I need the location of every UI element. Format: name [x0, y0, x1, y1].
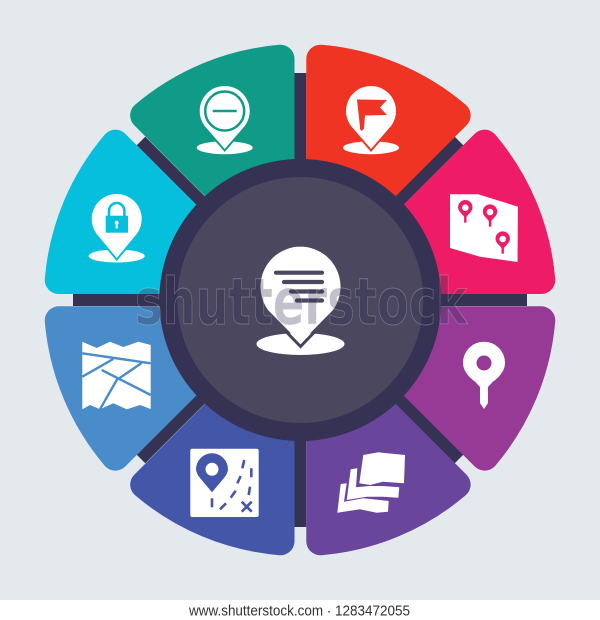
icon: slim location pin — [463, 342, 505, 409]
icon: stacked map sheets — [337, 452, 405, 513]
centre disc — [159, 159, 441, 441]
icon: map with three pins — [450, 194, 518, 262]
footer text: www.shutterstock.com · 1283472055 — [188, 604, 410, 620]
footer strip — [0, 600, 600, 620]
icon: central pin with text lines — [256, 247, 344, 355]
icon: street map — [82, 342, 151, 409]
watermark: shutterstock — [135, 266, 468, 340]
icon: treasure map with pin and route — [190, 449, 259, 517]
panel: teal segment, pin with minus — [130, 45, 295, 196]
panel: red segment, pin with flag — [306, 45, 471, 196]
panel: cyan segment, pin with padlock — [45, 130, 196, 294]
panel: purple segment, location pin — [404, 306, 555, 471]
icon: pin with minus sign — [197, 86, 253, 154]
panel: indigo segment, treasure map — [130, 404, 295, 555]
panel: violet segment, stacked map sheets — [306, 404, 471, 555]
panel: pink segment, map with three pins — [404, 130, 555, 294]
panel: blue segment, street map — [45, 306, 196, 471]
icon: pin with padlock — [89, 194, 145, 262]
icon: pin with flag — [343, 86, 399, 154]
